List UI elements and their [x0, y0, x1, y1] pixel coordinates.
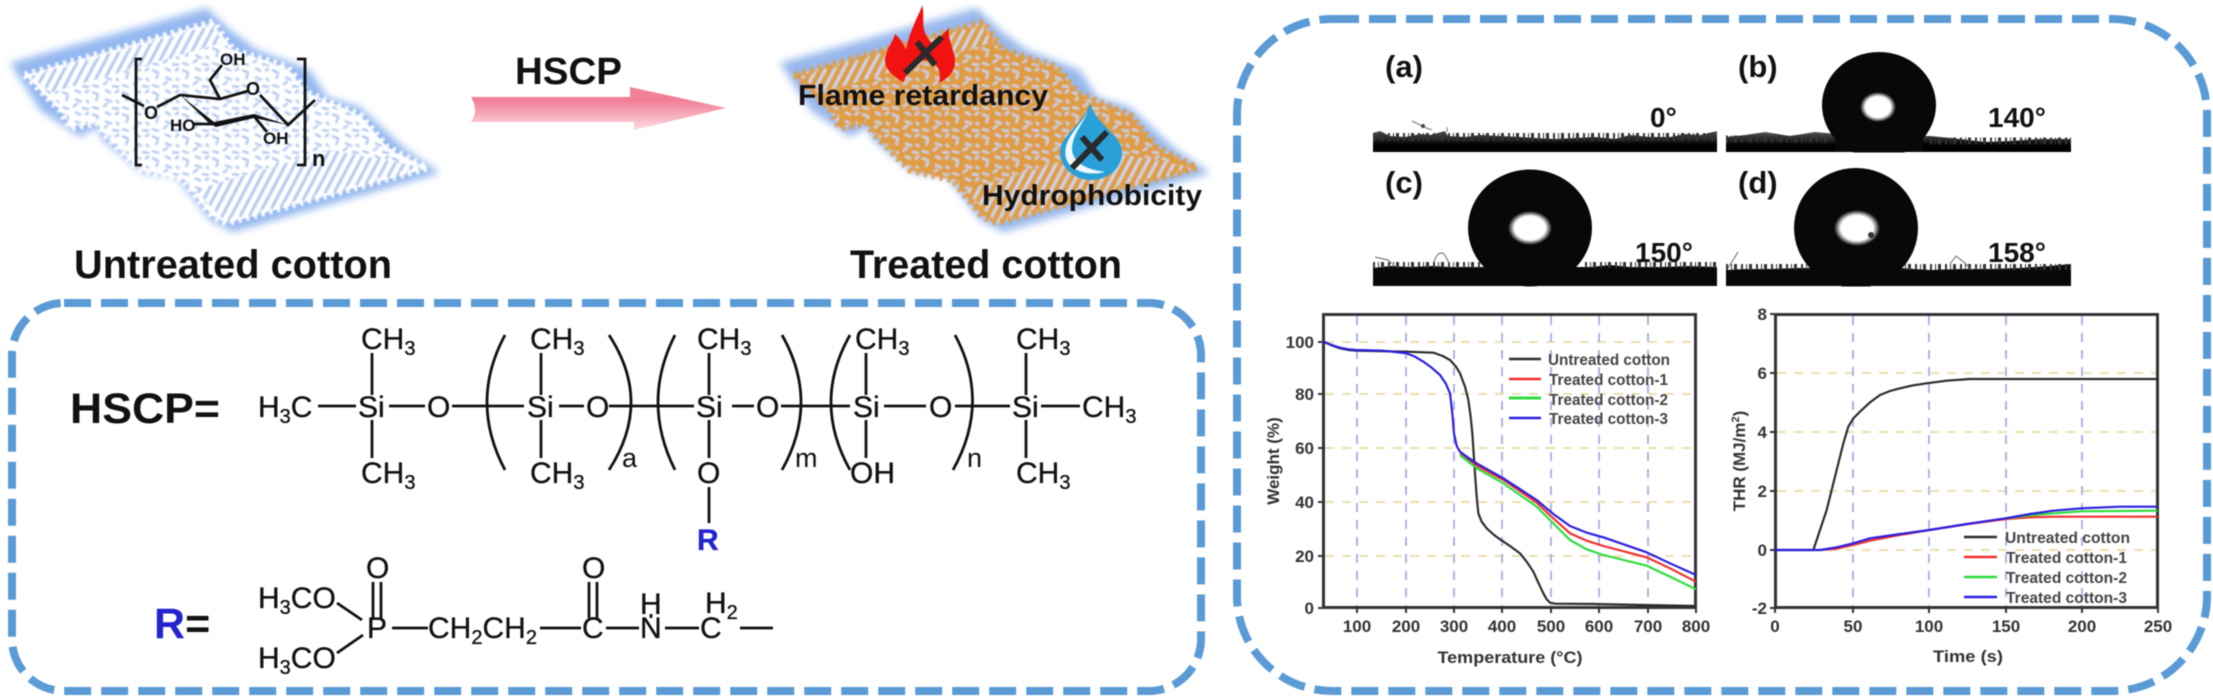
R group formula: H: [640, 588, 662, 621]
photo a: 0 degree contact angle: [1373, 49, 1717, 152]
HSCP polymer formula: 3: [404, 338, 415, 360]
illustration: untreated cotton fabric with cellulose structure: [10, 8, 440, 232]
dashed panel border: [1237, 19, 2207, 691]
THR x axis labels: 250: [2144, 617, 2172, 636]
cellulose repeat unit: O: [246, 79, 260, 99]
HSCP polymer formula: CH: [697, 323, 740, 356]
HSCP polymer formula: OH: [850, 457, 895, 490]
TGA x axis labels: 100: [1343, 617, 1371, 636]
HSCP= heading: HSCP=: [70, 385, 220, 433]
HSCP polymer formula: O: [697, 457, 720, 490]
HSCP polymer formula: 3: [573, 338, 584, 360]
THR x axis labels: 100: [1915, 617, 1943, 636]
fabric swatch: white with blue glow: [10, 8, 440, 232]
R group formula: CH: [482, 612, 526, 645]
cellulose repeat unit: OH: [263, 129, 288, 148]
photo c: 150 degree contact angle: (c): [1385, 165, 1423, 200]
chart: weight vs temperature (TGA): [1264, 314, 1710, 667]
TGA x axis labels: 800: [1682, 617, 1710, 636]
TGA legend: Untreated cotton: [1548, 352, 1670, 369]
photo d: 158 degree contact angle: [1726, 165, 2071, 290]
HSCP polymer formula: CH: [855, 323, 898, 356]
R group formula: O: [582, 552, 605, 585]
TGA x axis labels: 200: [1392, 617, 1420, 636]
TGA x axis labels: [1343, 617, 1710, 667]
photo c: 150 degree contact angle: 150°: [1635, 237, 1693, 268]
photo a: 0 degree contact angle: (a): [1385, 49, 1423, 84]
cellulose repeat unit: O: [144, 103, 158, 123]
R= heading: R=: [154, 600, 210, 648]
THR y axis labels: THR (MJ/m: [1730, 423, 1749, 511]
R group formula: 2: [727, 602, 738, 624]
THR y axis labels: 6: [1758, 364, 1767, 383]
THR y axis labels: 2: [1758, 482, 1767, 501]
TGA legend: Treated cotton-3: [1549, 411, 1668, 428]
TGA x axis labels: 400: [1488, 617, 1516, 636]
R group formula: 2: [526, 627, 537, 649]
TGA y axis labels: 100: [1286, 333, 1314, 352]
THR y axis labels: 2: [1730, 416, 1742, 423]
TGA curves: [1323, 342, 1696, 606]
THR y axis labels: 8: [1758, 305, 1767, 324]
HSCP polymer formula: 3: [1125, 406, 1136, 428]
R group formula: H: [258, 582, 280, 615]
HSCP polymer formula: CH: [361, 457, 404, 490]
THR x axis labels: 150: [1992, 617, 2020, 636]
THR curves: [1775, 379, 2158, 550]
TGA legend: [1509, 352, 1670, 428]
THR x axis labels: [1770, 617, 2172, 666]
HSCP polymer formula: 3: [1059, 338, 1070, 360]
HSCP polymer formula: Si: [527, 391, 554, 424]
HSCP polymer formula: O: [929, 391, 952, 424]
HSCP polymer formula: CH: [530, 457, 573, 490]
HSCP polymer formula: 3: [404, 472, 415, 494]
TGA y axis labels: 40: [1295, 493, 1314, 512]
R group formula: 3: [280, 597, 291, 619]
THR legend: Treated cotton-2: [2006, 570, 2127, 587]
photo b: 140 degree contact angle: 140°: [1988, 102, 2046, 133]
THR x axis labels: Time (s): [1933, 647, 2003, 666]
THR y axis labels: -2: [1752, 599, 1767, 618]
photo c: 150 degree contact angle: [1373, 165, 1717, 286]
THR x axis labels: 200: [2068, 617, 2096, 636]
TGA x axis labels: 700: [1634, 617, 1662, 636]
HSCP polymer formula: C: [291, 391, 312, 424]
HSCP polymer formula: Si: [1012, 391, 1039, 424]
TGA y axis labels: 20: [1295, 547, 1314, 566]
hydrophobicity label: Hydrophobicity: [982, 180, 1202, 212]
HSCP polymer formula: a: [622, 443, 638, 473]
THR x axis labels: 0: [1770, 617, 1780, 636]
HSCP polymer formula: CH: [1016, 457, 1059, 490]
reaction arrow with HSCP label: HSCP: [515, 51, 622, 93]
HSCP polymer formula: R: [697, 524, 719, 557]
TGA legend: Treated cotton-1: [1549, 372, 1668, 389]
HSCP polymer formula: 3: [1059, 472, 1070, 494]
reaction arrow with HSCP label: [471, 51, 726, 130]
THR y axis labels: [1730, 305, 1768, 618]
HSCP polymer formula: n: [967, 443, 982, 473]
chart: total heat release vs time: [1730, 305, 2172, 666]
icon: crossed-out flame: [885, 5, 955, 83]
TGA y axis labels: 0: [1305, 599, 1314, 618]
fabric swatch: orange with blue glow: [780, 8, 1210, 232]
label: treated cotton: Treated cotton: [850, 243, 1122, 287]
HSCP polymer formula: Si: [696, 391, 723, 424]
HSCP polymer formula: O: [427, 391, 450, 424]
HSCP polymer formula: Si: [853, 391, 880, 424]
cellulose repeat unit: OH: [220, 50, 246, 69]
R group formula: 3: [280, 657, 291, 679]
HSCP polymer formula: CH: [1082, 391, 1125, 424]
label: untreated cotton: Untreated cotton: [74, 243, 392, 287]
illustration: treated cotton fabric: [780, 5, 1210, 232]
cellulose repeat unit: [122, 50, 325, 171]
TGA x axis labels: 500: [1537, 617, 1565, 636]
HSCP polymer formula: CH: [361, 323, 404, 356]
HSCP polymer formula: O: [756, 391, 779, 424]
HSCP polymer formula: 3: [573, 472, 584, 494]
panel: chemical structures of HSCP and R group: [12, 303, 1201, 691]
THR legend: Untreated cotton: [2005, 530, 2130, 547]
THR legend: Treated cotton-3: [2006, 590, 2127, 607]
R group formula: O: [366, 552, 389, 585]
R group formula: H: [258, 642, 280, 675]
cellulose repeat unit: n: [312, 146, 325, 171]
THR x axis labels: 50: [1844, 617, 1862, 636]
HSCP polymer formula: 3: [740, 338, 751, 360]
R group formula: 2: [471, 627, 482, 649]
HSCP polymer formula: Si: [358, 391, 385, 424]
TGA y axis labels: 60: [1295, 439, 1314, 458]
flame retardancy label: Flame retardancy: [798, 80, 1048, 112]
TGA y axis labels: [1264, 333, 1314, 618]
R group formula: CO: [291, 642, 336, 675]
HSCP polymer formula: O: [586, 391, 609, 424]
TGA x axis labels: 300: [1440, 617, 1468, 636]
THR y axis labels: 0: [1758, 541, 1767, 560]
dashed panel border: [12, 303, 1201, 691]
R group formula: [258, 552, 773, 679]
photo b: 140 degree contact angle: [1726, 49, 2071, 160]
photo d: 158 degree contact angle: (d): [1738, 165, 1778, 200]
R group formula: C: [582, 612, 604, 645]
HSCP polymer formula: CH: [1016, 323, 1059, 356]
THR legend: [1964, 530, 2130, 607]
panel: contact angle photos and thermal charts: [1237, 19, 2207, 691]
THR y axis labels: ): [1730, 411, 1749, 416]
cellulose repeat unit: HO: [170, 116, 196, 135]
photo b: 140 degree contact angle: (b): [1738, 49, 1778, 84]
HSCP polymer formula: 3: [898, 338, 909, 360]
THR legend: Treated cotton-1: [2006, 550, 2127, 567]
icon: crossed-out water drop: [1060, 103, 1122, 180]
R group formula: CO: [291, 582, 336, 615]
HSCP polymer formula: H: [258, 391, 280, 424]
TGA x axis labels: Temperature (°C): [1438, 648, 1582, 667]
TGA x axis labels: 600: [1585, 617, 1613, 636]
TGA y axis labels: 80: [1295, 385, 1314, 404]
HSCP polymer formula: [258, 323, 1136, 557]
HSCP polymer formula: CH: [530, 323, 573, 356]
R group formula: C: [700, 612, 722, 645]
R group formula: H: [705, 587, 727, 620]
TGA y axis labels: Weight (%): [1264, 417, 1283, 505]
R group formula: P: [367, 612, 387, 645]
HSCP polymer formula: m: [795, 443, 818, 473]
photo d: 158 degree contact angle: 158°: [1988, 237, 2046, 268]
HSCP polymer formula: 3: [280, 406, 291, 428]
photo a: 0 degree contact angle: 0°: [1650, 102, 1677, 133]
TGA legend: Treated cotton-2: [1549, 392, 1668, 409]
R group formula: CH: [428, 612, 471, 645]
R group formula: N: [640, 612, 662, 645]
THR y axis labels: 4: [1758, 423, 1768, 442]
